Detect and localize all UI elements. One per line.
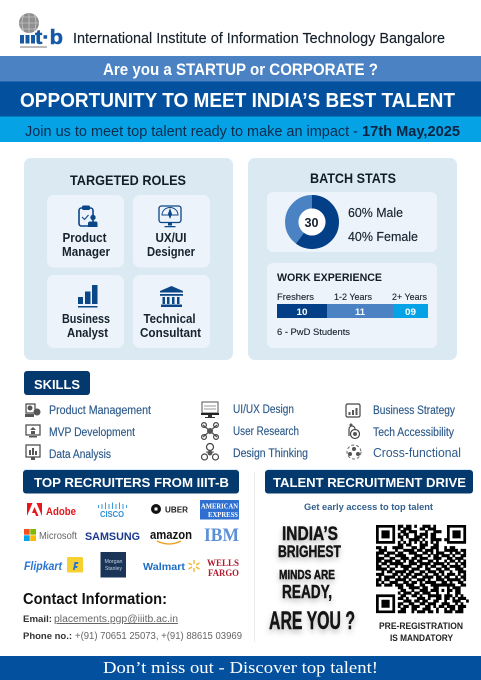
section rules [24, 469, 471, 642]
icon: clipboard person [79, 206, 98, 227]
logo: american express: AMERICAN [201, 502, 239, 510]
skill: user research: User Research [233, 426, 299, 438]
heading: batch stats: BATCH STATS [310, 170, 396, 186]
logo: amazon: amazon [150, 527, 192, 542]
icon: institution building [160, 286, 183, 307]
logo: samsung: SAMSUNG [85, 531, 140, 543]
banner: main headline [0, 82, 481, 116]
email line: Email: [23, 614, 52, 625]
legend: gender split: 40% Female [348, 229, 418, 244]
label: product manager [62, 231, 110, 259]
icon: bar chart [78, 285, 98, 308]
banner: event date [0, 116, 481, 142]
bar labels: Freshers [277, 292, 314, 303]
card: work experience [267, 263, 437, 348]
heading: skills [24, 371, 90, 395]
bar labels [277, 292, 427, 303]
logo: microsoft: Microsoft [39, 531, 77, 542]
skill: cross-functional: Cross-functional [373, 446, 461, 460]
logo: american express: EXPRESS [208, 510, 238, 519]
logo: morgan stanley: Morgan [104, 559, 122, 565]
logo: cisco: CISCO [100, 510, 124, 519]
logo: wells fargo: WELLS [207, 558, 239, 568]
logo: uber [151, 504, 188, 514]
label: business analyst: Business [62, 312, 110, 326]
note: pre-registration mandatory [379, 621, 463, 643]
heading: targeted roles: TARGETED ROLES [70, 172, 186, 188]
logo: ibm: IBM [204, 525, 239, 546]
icon: design monitor [159, 206, 181, 227]
legend: gender split: 60% Male [348, 205, 403, 220]
logo: walmart [143, 560, 200, 573]
header: logo and institute name [19, 13, 445, 49]
label: business analyst [62, 312, 110, 340]
heading: talent recruitment drive: TALENT RECRUITMENT DRIVE [273, 475, 466, 490]
stacked bar chart: 09 [405, 307, 416, 318]
donut chart: 60 percent male, 40 percent female [292, 202, 332, 242]
skill: user research [202, 423, 299, 439]
label: technical consultant: Technical [144, 312, 196, 326]
panel: batch stats [248, 158, 457, 360]
recruiter logos [24, 500, 239, 578]
skills list [25, 402, 461, 461]
poster slogan: READY, [282, 582, 332, 602]
skill: ui ux design [201, 402, 294, 418]
skill: mvp development [26, 425, 136, 439]
label: product manager: Product [62, 231, 107, 245]
skill: product management: Product Management [49, 405, 152, 417]
phone line: +(91) 70651 25073, +(91) 88615 03969 [75, 631, 242, 642]
card: product manager [47, 195, 124, 268]
poster slogan: BRIGHEST [278, 542, 341, 561]
stacked bar chart: 10 [296, 307, 308, 318]
email line: placements.pgp@iiitb.ac.in [54, 614, 178, 625]
poster slogan: MINDS ARE [279, 567, 335, 582]
banner: main headline: OPPORTUNITY TO MEET INDIA’S BEST TALENT [20, 90, 455, 112]
label: business analyst: Analyst [67, 326, 109, 340]
heading: top recruiters: TOP RECRUITERS FROM IIIT-B [34, 475, 229, 490]
institute name: International Institute of Information Technology Bangalore [73, 30, 445, 47]
skill: data analysis [26, 445, 111, 461]
note: pre-registration mandatory: PRE-REGISTRATION [379, 621, 463, 631]
legend: gender split [348, 205, 418, 244]
banner: startup or corporate [0, 56, 481, 82]
card: technical consultant [133, 275, 210, 348]
skill: mvp development: MVP Development [49, 427, 136, 439]
logo: american express [200, 500, 239, 520]
heading: top recruiters [23, 470, 239, 494]
card: ux ui designer [133, 195, 210, 268]
poster slogan [269, 524, 355, 635]
card: business analyst [47, 275, 124, 348]
bar labels: 2+ Years [392, 292, 427, 303]
note: pre-registration mandatory: IS MANDATORY [390, 633, 453, 643]
skill: design thinking [202, 444, 308, 460]
label: technical consultant: Consultant [140, 326, 202, 340]
logo: cisco [98, 502, 126, 519]
phone line: Phone no.: [23, 631, 72, 642]
logo: wells fargo [207, 558, 239, 578]
banner: event date: Join us to meet top talent ready to make an impact - [25, 123, 358, 140]
logo: walmart: Walmart [143, 561, 186, 573]
skill: tech accessibility [349, 424, 454, 439]
label: product manager: Manager [62, 245, 110, 259]
subheading: early access: Get early access to top talent [304, 502, 434, 513]
stacked bar chart: 11 [355, 307, 366, 318]
heading: contact information: Contact Information: [23, 591, 167, 608]
label: technical consultant [140, 312, 202, 340]
footer banner [0, 656, 481, 680]
poster slogan: INDIA’S [282, 524, 338, 545]
label: ux ui designer: UX/UI [156, 231, 186, 245]
card: gender split [267, 192, 437, 252]
donut chart: 60 percent male, 40 percent female: 30 [304, 216, 319, 230]
footer banner: Don’t miss out - Discover top talent! [103, 658, 378, 677]
skill: data analysis: Data Analysis [49, 449, 111, 461]
logo: adobe: Adobe [46, 506, 76, 518]
skill: business strategy [346, 404, 455, 417]
poster slogan: ARE YOU ? [269, 607, 355, 635]
label: ux ui designer: Designer [147, 245, 195, 259]
logo: microsoft [24, 529, 77, 542]
skill: ui ux design: UI/UX Design [233, 404, 294, 416]
logo: adobe [27, 503, 76, 518]
icon: IIIT-B logo: t·b [35, 27, 63, 49]
label: ux ui designer [147, 231, 195, 259]
bar labels: 1-2 Years [334, 292, 372, 303]
note: pwd students: 6 - PwD Students [277, 327, 350, 338]
skill: design thinking: Design Thinking [233, 448, 308, 460]
banner: event date: 17th May,2025 [362, 123, 460, 140]
heading: talent recruitment drive [265, 470, 473, 494]
skill: tech accessibility: Tech Accessibility [373, 427, 454, 439]
qr code [376, 525, 469, 613]
heading: skills: SKILLS [34, 377, 80, 392]
logo: flipkart [24, 557, 83, 573]
contact information [23, 591, 242, 642]
stacked bar chart [277, 304, 428, 318]
heading: work experience: WORK EXPERIENCE [277, 272, 382, 284]
logo: wells fargo: FARGO [208, 568, 239, 578]
panel: targeted roles [24, 158, 233, 360]
logo: morgan stanley [100, 552, 126, 578]
skill: business strategy: Business Strategy [373, 405, 455, 417]
banner: startup or corporate: Are you a STARTUP or CORPORATE ? [103, 61, 378, 79]
logo: uber: UBER [165, 506, 188, 514]
logo: morgan stanley: Stanley [105, 566, 122, 572]
icon: IIIT-B logo [19, 13, 63, 49]
logo: flipkart: Flipkart [24, 561, 63, 573]
